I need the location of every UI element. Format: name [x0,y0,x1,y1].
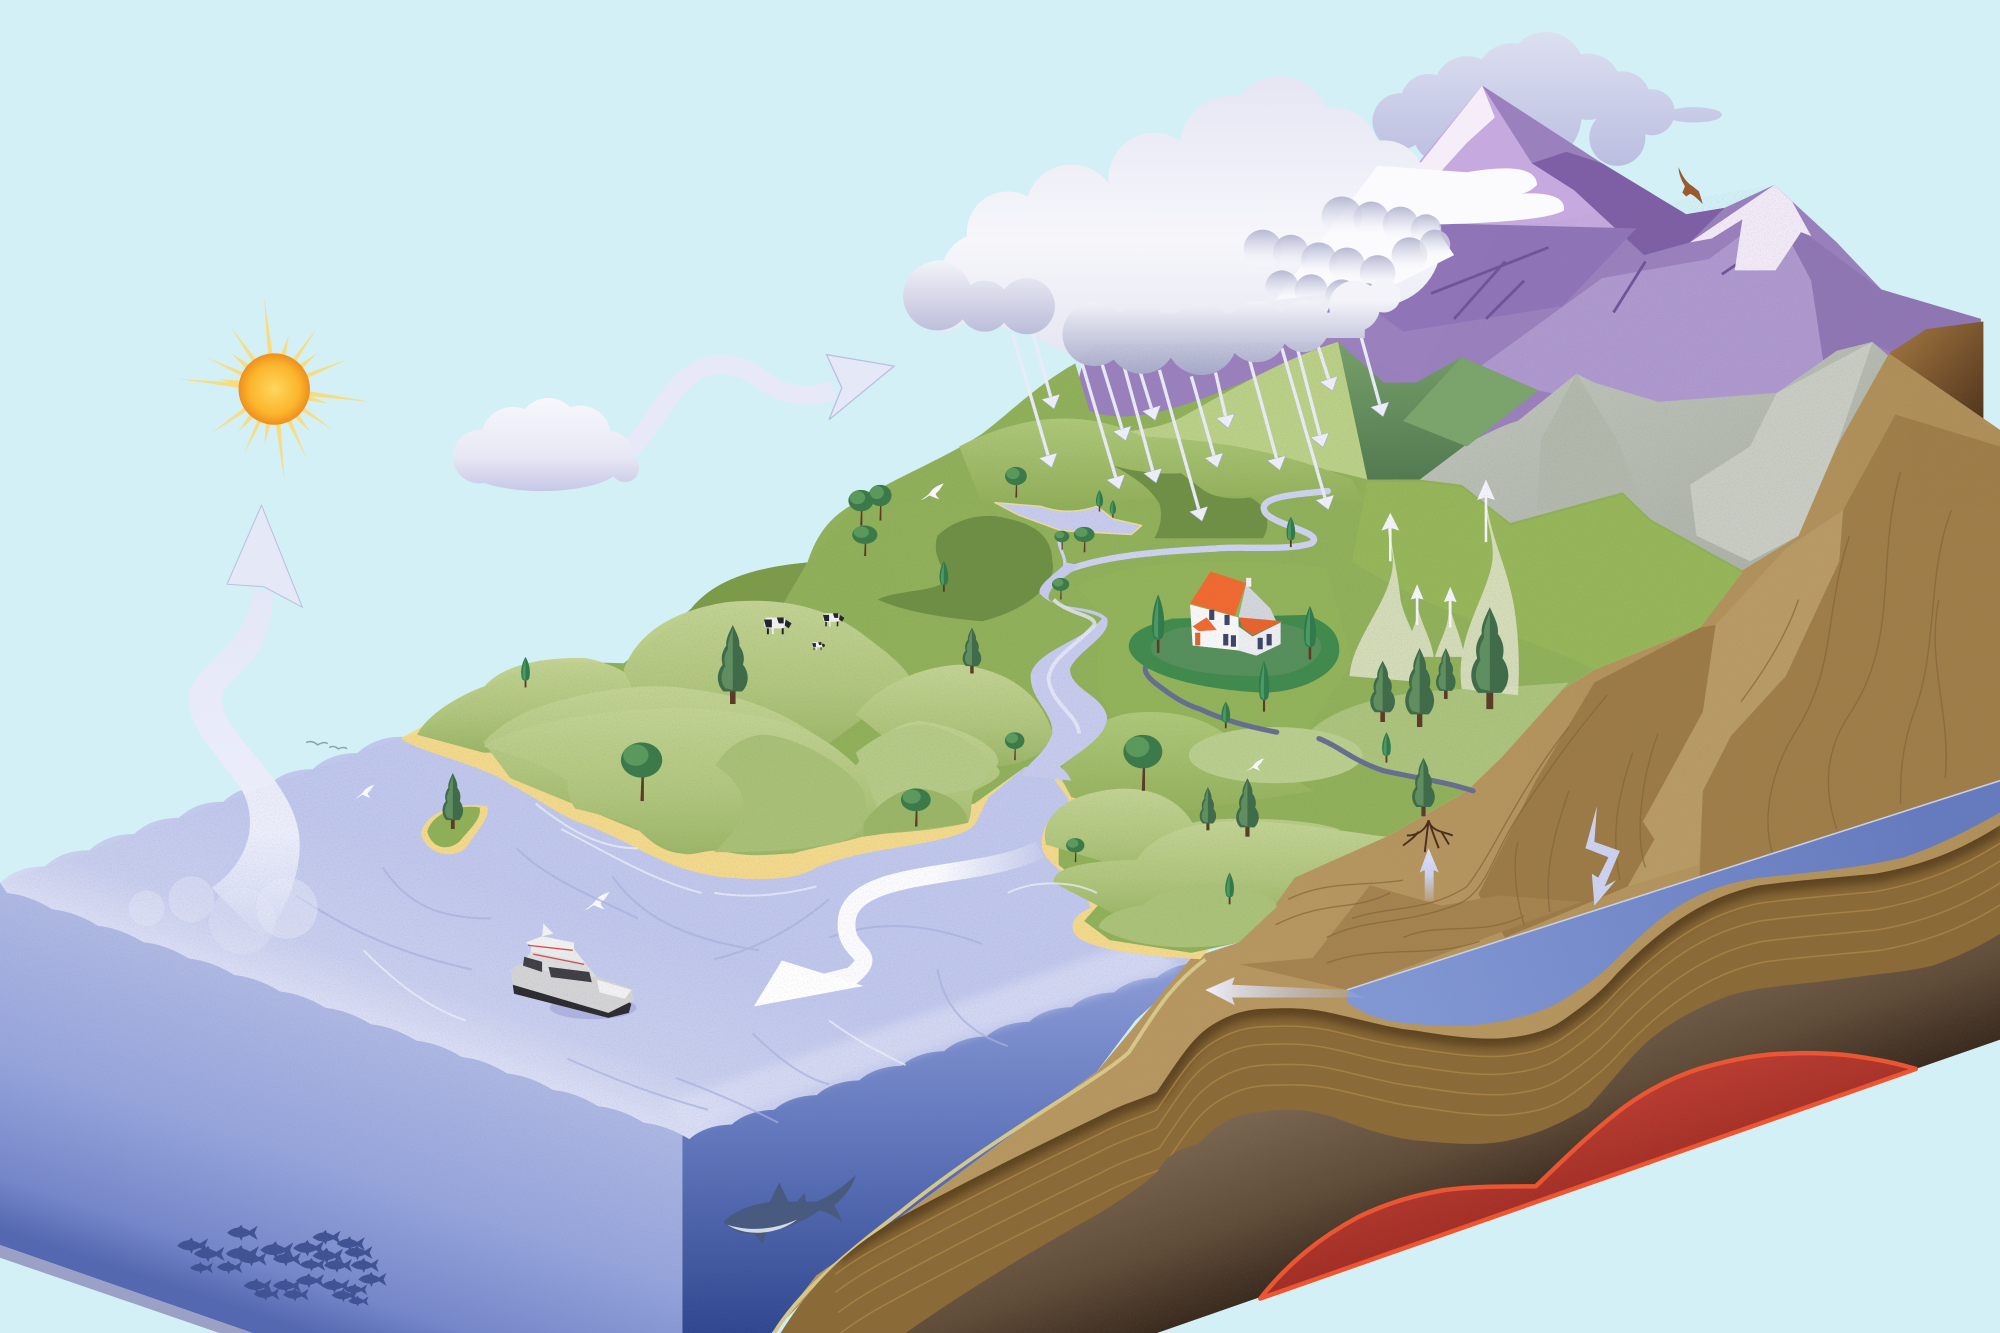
snow cap main peak [1418,85,1495,185]
ripples [296,804,1097,1123]
side walls [1239,622,1281,656]
porch walls [1194,630,1217,648]
blue aquifer [1347,781,2000,1026]
green mountain [1338,342,1538,480]
hills: west group [417,601,1052,855]
arrow: evaporation from ocean [129,505,318,954]
mountain base [1069,85,1981,491]
fish school [177,1225,386,1307]
trees [521,467,1508,904]
lit upper facet [1416,85,1644,236]
sea: right face [682,957,1205,1333]
round trees [621,742,662,801]
river: main channel [1020,563,1108,781]
road [1145,658,1473,791]
left underside [903,261,1055,334]
shaded facet [1532,152,1724,255]
shark [723,1175,856,1244]
porch roof [1193,617,1217,631]
darker deep rock zone [1699,415,2000,893]
steam plumes [1349,497,1519,695]
arrow: groundwater discharge [1205,977,1365,1005]
steam arrows [1381,480,1495,628]
strata lines and shadow [835,825,2000,1333]
chimney [1246,578,1251,587]
sea: base rim [0,1245,253,1333]
windows [1209,610,1272,649]
hedge [1129,615,1339,693]
tree roots [1403,820,1453,852]
soil: back block [1889,321,1983,423]
pale upper hill [1097,342,1367,480]
arrow: infiltration [1585,806,1620,906]
mountains: purple peaks [1069,85,1981,491]
outer pale rim [774,959,1205,1333]
tan rock grain lines [1276,472,1952,963]
conifers [718,625,748,704]
wing roof [1239,617,1283,635]
stratified brown layer [781,825,2000,1333]
sea surface [0,737,1199,1139]
soil arrows [1205,806,1620,1005]
lawn [1151,622,1321,676]
lower fold zone [1240,885,1582,990]
arrow: river runoff [754,850,1040,1006]
scalloped cloud folds [1244,196,1450,314]
cloud body [906,77,1441,353]
gable [1239,584,1277,622]
distant gulls [306,742,347,749]
grey rocky mountains [1384,342,1893,570]
back ridge west [676,563,807,625]
bright cloud tail [1276,166,1564,300]
light fold band [1628,510,1843,887]
dark rock layer [906,934,2000,1333]
eagle [1679,167,1703,204]
rain arrows [1013,309,1380,510]
hills: east group [1045,561,1569,947]
boat shadow [550,996,636,1019]
boat [510,924,636,1019]
dark patch upper [1114,466,1267,538]
small cloud [453,398,639,491]
porch door [1195,633,1200,645]
land base [417,342,1742,953]
river: highlight [1048,600,1095,733]
rear cloud [1372,32,1722,166]
rock gashes [1431,247,1750,319]
river: outflow from lake [1059,533,1065,569]
dark patch west [878,516,1053,621]
slim cypress trees [521,657,530,688]
middle fold zone [1478,625,1716,938]
river: upper channel [1061,491,1328,573]
island [421,773,488,854]
lower cabin [523,952,597,977]
upper tan rock [772,353,2000,1333]
snow cap second peak [1690,185,1811,270]
main roof [1190,571,1246,616]
front purple ridge [1467,210,1827,415]
rain cloud [903,77,1564,375]
mast [542,924,554,936]
sea surface: light near right edge [663,938,1180,1129]
upper deck [526,936,574,950]
black lower hull [513,982,631,1018]
shaded right flank [1774,210,1981,395]
second deck [531,941,585,963]
soil: cross-section [772,353,2000,1333]
lake [995,503,1142,534]
house plot [1129,571,1339,693]
middle facet [1352,223,1636,332]
dark underside [1062,279,1401,375]
aquifer highlight edge [1347,781,2000,990]
grey hull [510,963,634,1013]
upper east hills [1352,482,1742,670]
arrow: water vapour moving inland [599,355,894,469]
cabin windows [523,957,592,982]
magma [1260,1053,1916,1299]
beach: east shore [1042,774,1224,959]
bow highlight [597,980,631,999]
sea: left face [0,883,682,1333]
front walls [1190,605,1239,651]
birds [306,483,1264,910]
sun [177,297,371,481]
arrow: root uptake [1420,848,1439,901]
cows [764,613,844,650]
red trim [528,945,584,964]
beach: west shore [401,727,1027,879]
upper hills row [959,418,1365,504]
